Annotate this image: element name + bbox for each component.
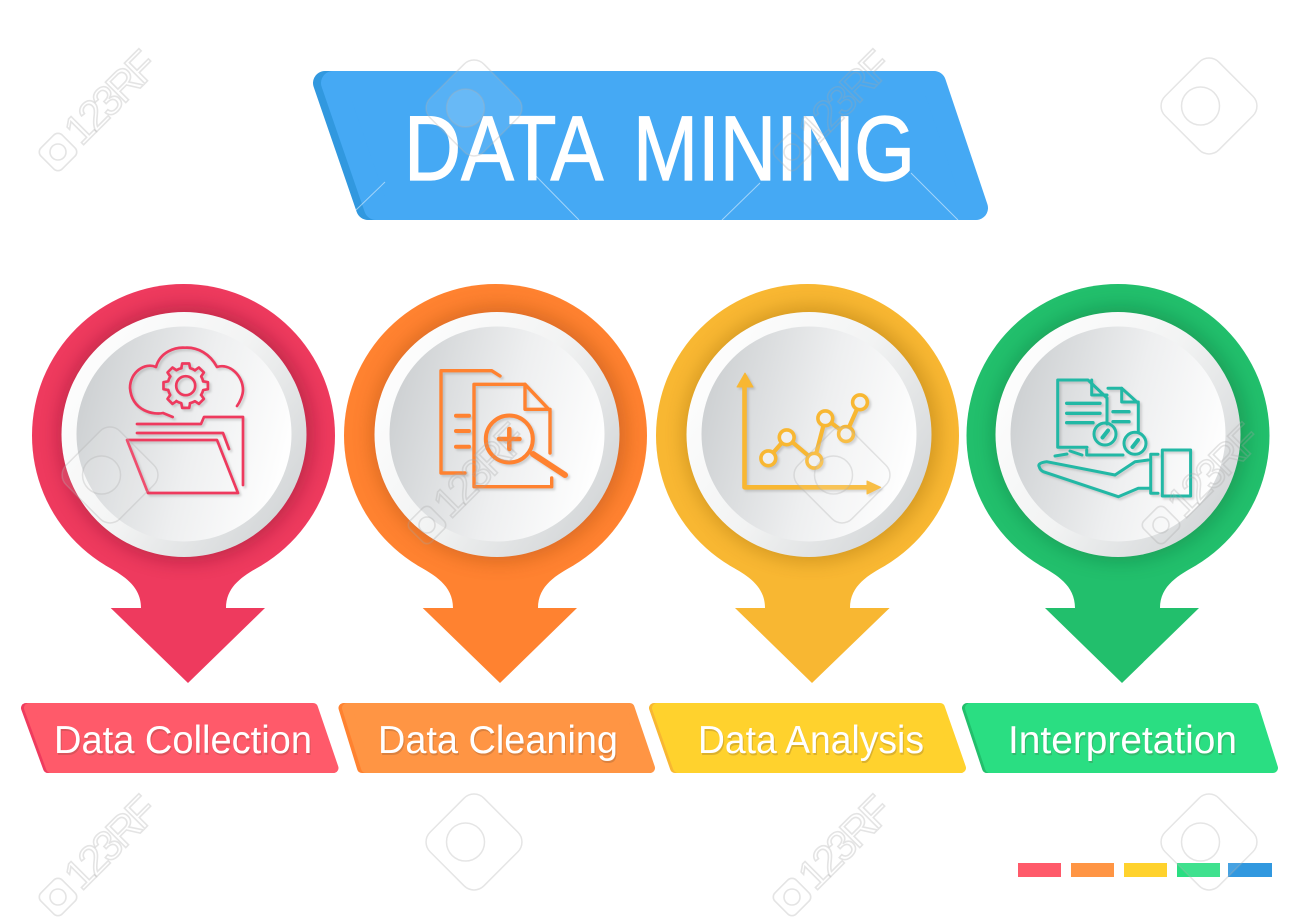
label: data collection — [26, 708, 334, 768]
icon: documents approved on a hand — [1039, 380, 1191, 497]
label: data collection: Data Collection — [54, 719, 312, 762]
title text: MINING — [633, 98, 915, 200]
icon: cloud gear and folder — [127, 348, 243, 493]
label: data analysis: Data Analysis — [698, 719, 924, 762]
label: data cleaning: Data Cleaning — [378, 719, 618, 762]
icon: documents and magnifier — [441, 371, 565, 487]
pin body and arrow — [966, 284, 1270, 683]
watermark stamps: 123RF — [54, 786, 167, 898]
watermark stamps: 123RF — [788, 786, 901, 898]
label: interpretation — [967, 708, 1273, 768]
pin body and arrow — [32, 284, 335, 683]
white disc — [686, 312, 932, 557]
watermark stamps: 123RF — [423, 414, 536, 526]
title banner — [325, 83, 976, 220]
white disc — [374, 312, 620, 557]
pin: data cleaning — [344, 284, 647, 683]
watermark stamps: 123RF — [788, 41, 901, 153]
colour legend bars — [1018, 863, 1272, 877]
pin body and arrow — [656, 284, 959, 683]
label: data analysis — [654, 708, 961, 768]
pin: data analysis — [656, 284, 959, 683]
watermark stamps: 123RF — [1157, 414, 1270, 526]
pin: interpretation — [966, 284, 1270, 683]
white disc — [62, 312, 306, 557]
icon: line chart — [737, 373, 881, 494]
title text: DATA — [404, 98, 604, 200]
white disc — [996, 312, 1240, 557]
pin: data collection — [32, 284, 335, 683]
label: data cleaning — [344, 708, 650, 768]
watermark stamps: 123RF — [54, 41, 167, 153]
label: interpretation: Interpretation — [1008, 719, 1237, 762]
pin body and arrow — [344, 284, 647, 683]
